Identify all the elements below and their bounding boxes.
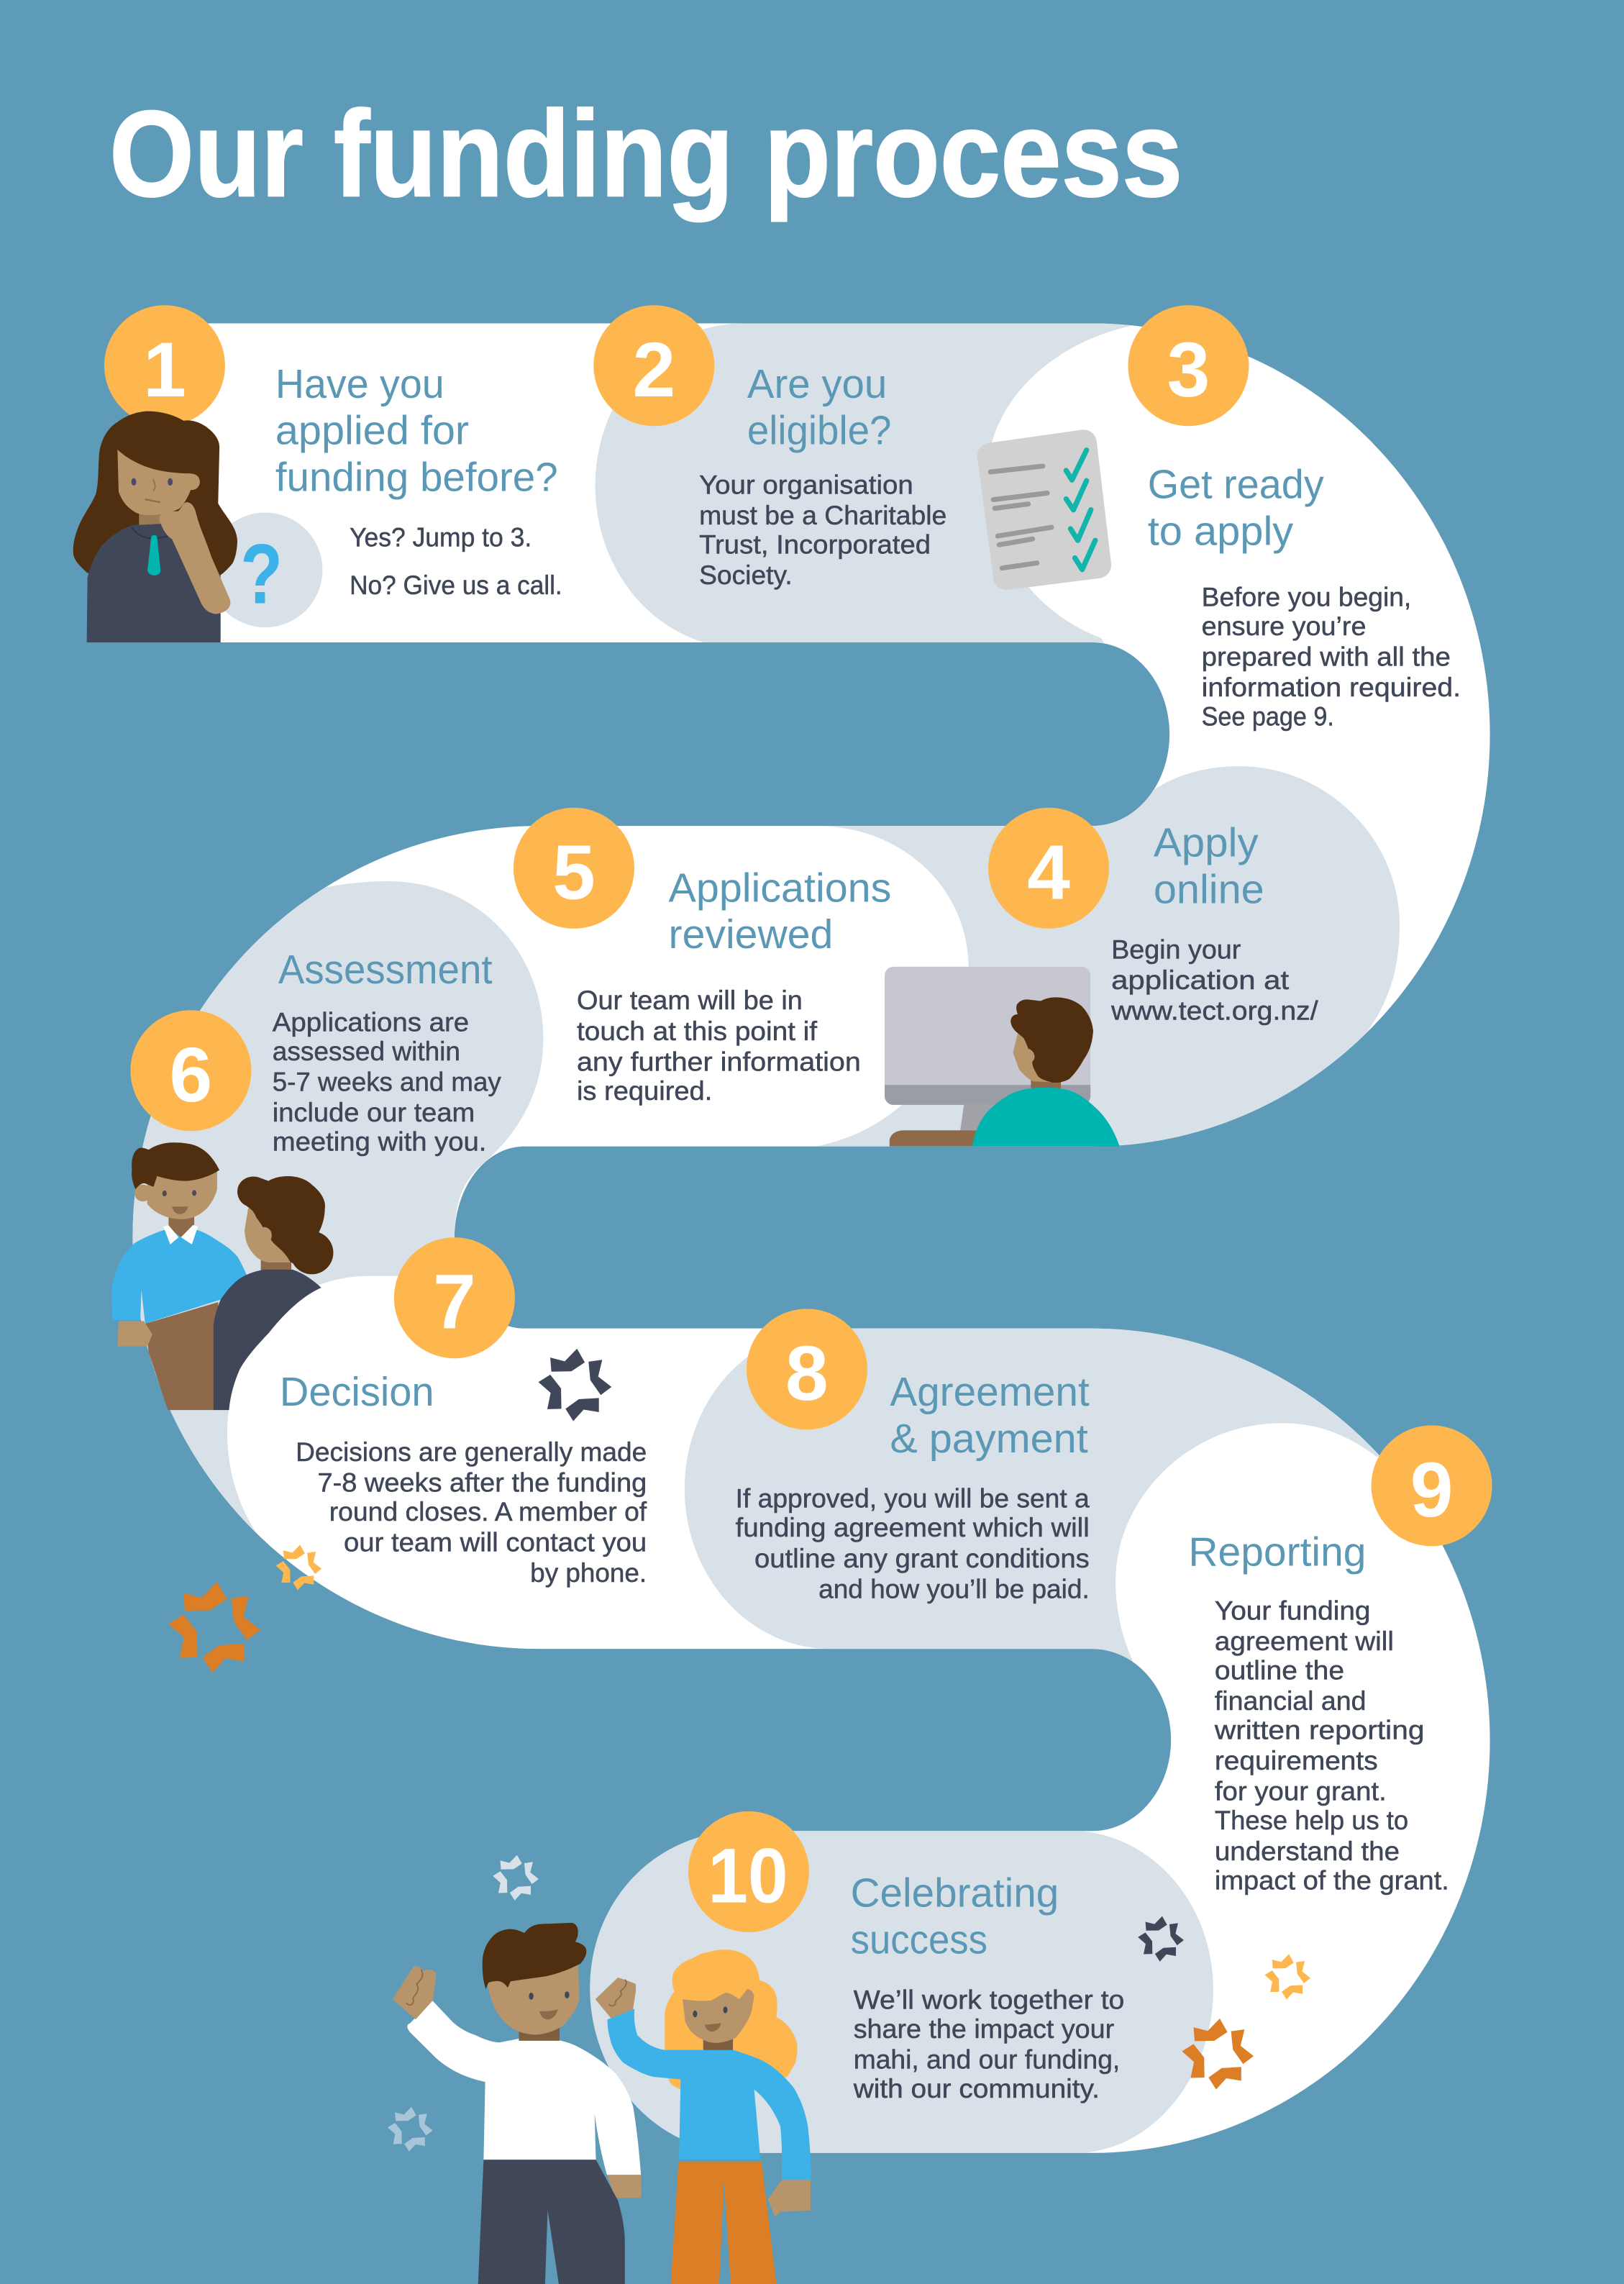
icon: question mark bubble <box>208 513 322 627</box>
body text: decision: by phone. <box>530 1557 647 1588</box>
body text: before you begin: See page 9. <box>1202 701 1334 731</box>
heading: have you applied: applied for <box>275 409 469 454</box>
heading: apply online: online <box>1154 867 1264 912</box>
badge 1: 1 <box>143 327 186 413</box>
badge 7: 7 <box>433 1259 476 1345</box>
body text: before you begin: prepared with all the <box>1202 641 1451 671</box>
body text: yes or no: No? Give us a call. <box>350 570 562 600</box>
panel: step 10 <box>388 1811 1184 2284</box>
icon: question mark bubble: ? <box>240 527 283 621</box>
panel: step 9 <box>1182 1425 1492 2090</box>
heading: apply online <box>1154 821 1264 912</box>
badge 8: 8 <box>785 1330 829 1416</box>
badge 2 <box>593 305 714 426</box>
body text: team in touch: any further information <box>577 1046 861 1076</box>
figure: two people meeting <box>111 1142 333 1410</box>
body text: decision: Decisions are generally made <box>296 1437 647 1467</box>
body text: decision <box>296 1437 647 1588</box>
body text: before you begin: ensure you’re <box>1202 611 1366 641</box>
body text: assessment <box>273 1007 501 1157</box>
heading: agreement and payment: & payment <box>890 1416 1088 1462</box>
body text: assessment: Applications are <box>273 1007 469 1037</box>
body text: reporting: for your grant. <box>1215 1776 1387 1806</box>
body text: agreement: and how you’ll be paid. <box>818 1573 1090 1603</box>
body text: agreement <box>736 1483 1090 1603</box>
figure: woman celebrating <box>596 1949 811 2284</box>
heading: have you applied: funding before? <box>275 455 558 500</box>
figure: thinking woman <box>73 411 237 642</box>
panel: step 6 <box>111 947 501 1410</box>
heading: have you applied <box>275 362 558 500</box>
body text: yes or no: Yes? Jump to 3. <box>350 522 532 552</box>
heading: have you applied: Have you <box>275 362 444 407</box>
body text: reporting <box>1214 1596 1449 1895</box>
body text: team in touch: touch at this point if <box>577 1016 818 1046</box>
badge 4: 4 <box>1027 829 1070 915</box>
figure: man celebrating <box>393 1923 642 2284</box>
badge 10 <box>688 1811 809 1932</box>
heading: assessment: Assessment <box>278 947 493 993</box>
body text: eligibility: Trust, Incorporated <box>699 529 931 559</box>
badge 3: 3 <box>1167 327 1210 413</box>
icon: yellow star <box>275 1544 321 1591</box>
icon: pale star upper <box>493 1855 539 1901</box>
body text: reporting: impact of the grant. <box>1215 1865 1449 1895</box>
heading: are you eligible: eligible? <box>747 409 891 454</box>
body text: celebrating: We’ll work together to <box>854 1984 1124 2014</box>
heading: are you eligible: Are you <box>747 362 887 407</box>
body text: reporting: financial and <box>1215 1685 1366 1716</box>
badge 2: 2 <box>632 327 675 413</box>
badge 8 <box>747 1309 867 1429</box>
body text: reporting: agreement will <box>1215 1626 1394 1656</box>
body text: celebrating: mahi, and our funding, <box>854 2044 1120 2074</box>
body text: team in touch <box>577 985 861 1106</box>
badge 6: 6 <box>170 1032 212 1118</box>
badge 9: 9 <box>1410 1447 1453 1533</box>
icon: checklist <box>990 443 1098 577</box>
body text: eligibility: Your organisation <box>699 469 913 499</box>
body text: begin application <box>1110 934 1318 1025</box>
body text: celebrating: with our community. <box>853 2073 1100 2103</box>
body text: begin application: www.tect.org.nz/ <box>1110 995 1318 1025</box>
body text: team in touch: Our team will be in <box>577 985 803 1015</box>
body text: decision: round closes. A member of <box>329 1496 647 1527</box>
heading: celebrating success <box>851 1871 1059 1962</box>
body text: eligibility <box>699 469 946 590</box>
body text: begin application: application at <box>1111 965 1290 995</box>
body text: celebrating: share the impact your <box>854 2014 1114 2044</box>
heading: decision: Decision <box>280 1370 434 1415</box>
heading: celebrating success: success <box>851 1917 987 1962</box>
body text: eligibility: Society. <box>699 560 793 590</box>
icon: orange star <box>168 1582 260 1673</box>
heading: agreement and payment <box>890 1370 1090 1462</box>
body text: reporting: understand the <box>1215 1836 1400 1866</box>
grey ribbon sections <box>88 324 1456 2153</box>
body text: decision: our team will contact you <box>344 1527 647 1557</box>
body text: reporting: requirements <box>1215 1745 1378 1775</box>
badge 1 <box>104 305 225 426</box>
illustration: person at computer <box>885 967 1120 1147</box>
panel: step 4 <box>885 808 1318 1147</box>
winding path ribbon <box>132 324 1490 2153</box>
badge 4 <box>988 808 1109 929</box>
body text: team in touch: is required. <box>577 1075 712 1106</box>
icon: orange star right <box>1182 2019 1254 2090</box>
badge 7 <box>394 1237 515 1358</box>
body text: celebrating <box>853 1984 1124 2103</box>
body text: reporting: outline the <box>1215 1655 1344 1685</box>
body text: agreement: outline any grant conditions <box>754 1543 1090 1573</box>
body text: assessment: include our team <box>273 1097 475 1127</box>
body text: before you begin: information required. <box>1202 672 1461 702</box>
body text: assessment: assessed within <box>273 1036 460 1066</box>
panel: step 5 <box>514 808 891 1106</box>
panel: step 2 <box>593 305 946 590</box>
icon: dark star small <box>1138 1916 1184 1962</box>
badge 5: 5 <box>552 829 596 915</box>
badge 3 <box>1128 305 1249 426</box>
icon: pale star lower <box>388 2107 433 2152</box>
panel: step 7 <box>168 1237 647 1673</box>
heading: applications reviewed: reviewed <box>669 912 833 957</box>
body text: eligibility: must be a Charitable <box>699 500 946 530</box>
heading: apply online: Apply <box>1154 821 1259 866</box>
heading: get ready to apply: to apply <box>1148 509 1294 554</box>
body text: yes or no <box>350 522 562 600</box>
body text: reporting: written reporting <box>1214 1715 1424 1745</box>
icon: dark star <box>539 1349 611 1421</box>
badge 6 <box>130 1010 251 1131</box>
body text: begin application: Begin your <box>1111 934 1241 964</box>
body text: reporting: Your funding <box>1215 1596 1371 1626</box>
heading: are you eligible <box>747 362 891 454</box>
icon: yellow star right <box>1264 1954 1310 2000</box>
body text: agreement: funding agreement which will <box>736 1512 1090 1542</box>
body text: before you begin <box>1202 581 1461 731</box>
body text: reporting: These help us to <box>1215 1805 1408 1835</box>
heading: get ready to apply: Get ready <box>1148 463 1324 508</box>
badge 9 <box>1372 1425 1492 1546</box>
panel: step 1 <box>73 305 562 642</box>
heading: applications reviewed <box>669 865 891 957</box>
heading: applications reviewed: Applications <box>669 865 891 911</box>
heading: reporting: Reporting <box>1188 1530 1366 1575</box>
title: Our funding process <box>109 86 1182 222</box>
body text: before you begin: Before you begin, <box>1202 581 1411 611</box>
body text: assessment: meeting with you. <box>273 1127 486 1157</box>
heading: agreement and payment: Agreement <box>890 1370 1090 1415</box>
heading: get ready to apply <box>1148 463 1324 554</box>
panel: step 8 <box>736 1309 1090 1603</box>
panel: step 3 <box>990 305 1461 731</box>
badge 10: 10 <box>708 1832 788 1919</box>
body text: decision: 7-8 weeks after the funding <box>318 1467 647 1497</box>
badge 5 <box>514 808 634 929</box>
body text: agreement: If approved, you will be sent a <box>736 1483 1090 1514</box>
body text: assessment: 5-7 weeks and may <box>273 1067 501 1097</box>
heading: celebrating success: Celebrating <box>851 1871 1059 1916</box>
